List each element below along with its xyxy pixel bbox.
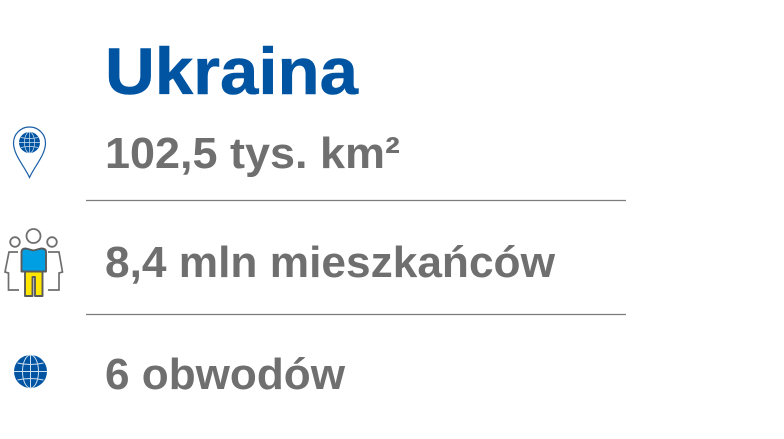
icon: map pin with globe [14, 127, 46, 178]
area text: 102,5 tys. km² [105, 129, 400, 178]
title: Ukraina [105, 34, 359, 108]
icon: globe [14, 355, 47, 388]
population icon: three people in Ukrainian colours [5, 229, 62, 296]
population text: 8,4 mln mieszkańców [105, 238, 556, 287]
regions text: 6 obwodów [105, 350, 346, 399]
